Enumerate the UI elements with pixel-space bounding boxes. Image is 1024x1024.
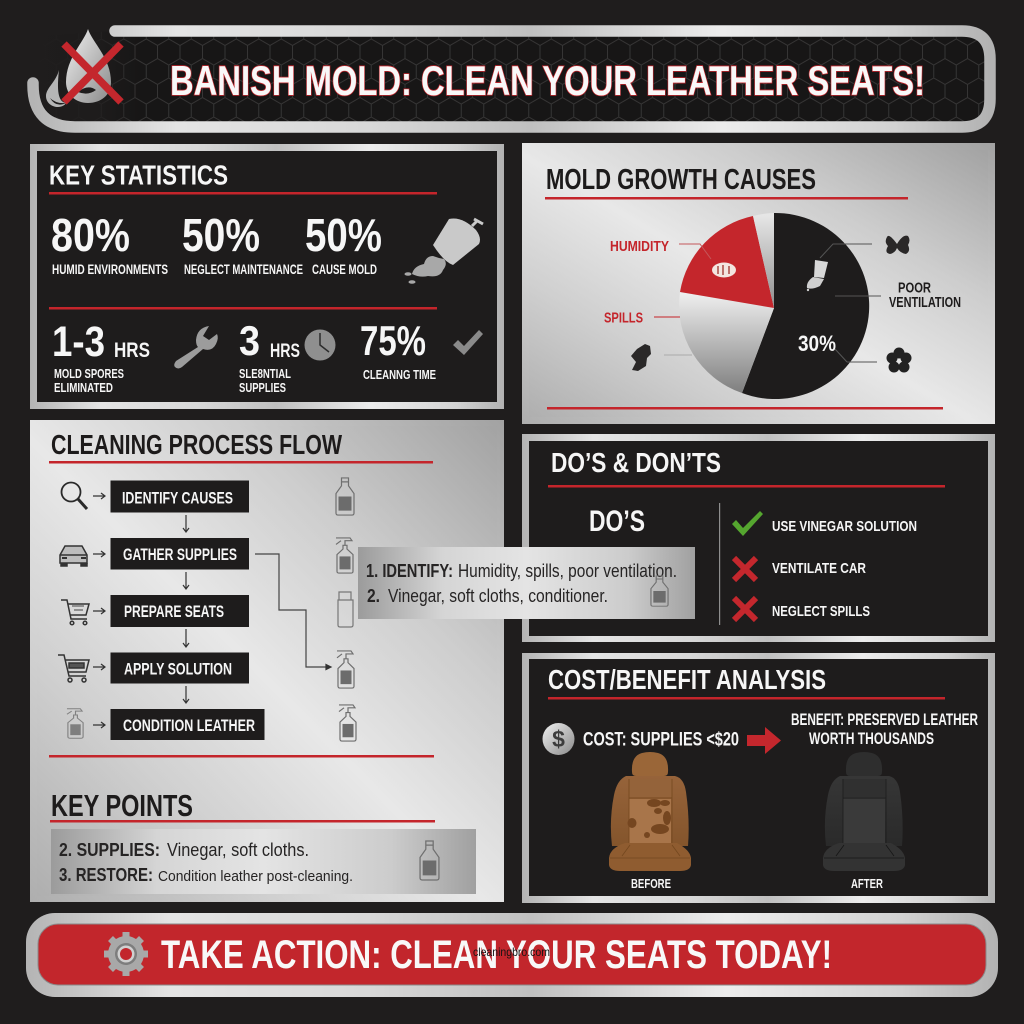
call to action text: TAKE ACTION: CLEAN YOUR SEATS TODAY! — [161, 933, 832, 977]
label: poor ventilation: VENTILATION — [889, 295, 961, 311]
item: ventilate car — [734, 558, 866, 580]
stat: 1-3 hrs mold spores eliminated: 1-3 — [52, 318, 105, 366]
panel: key statistics — [30, 144, 504, 409]
title banner — [30, 29, 990, 127]
icon: spray bottle 4 — [339, 705, 356, 741]
icon: spilled bottle — [404, 218, 483, 284]
callout: identify overlay: 2. — [367, 586, 380, 606]
label: benefit — [791, 710, 978, 748]
stat: 80% humid environments — [51, 209, 168, 277]
stat: 1-3 hrs mold spores eliminated: ELIMINATED — [54, 381, 113, 395]
stat: 3 hrs essential supplies: SUPPLIES — [239, 381, 286, 395]
heading: key points: KEY POINTS — [51, 788, 193, 823]
callout: key points: Condition leather post-cleaning. — [158, 868, 353, 885]
label: spills — [604, 310, 680, 326]
heading: cleaning process flow: CLEANING PROCESS FLOW — [51, 429, 342, 460]
arrows: flow connectors — [93, 493, 331, 728]
icon: dollar coin: $ — [552, 726, 565, 752]
heading: do's and don'ts: DO’S & DON’TS — [551, 447, 721, 478]
step: gather supplies — [110, 538, 249, 570]
label: poor ventilation: POOR — [898, 280, 931, 296]
callout: key points: 3. RESTORE: — [59, 865, 153, 885]
panel: mold growth causes — [522, 143, 995, 424]
icon: shopping cart with tray — [58, 655, 89, 682]
callout: identify overlay: 1. IDENTIFY: — [366, 561, 453, 581]
panel: cost/benefit analysis — [522, 653, 995, 903]
icon: gear — [104, 932, 148, 976]
stat: 50% neglect maintenance: NEGLECT MAINTENANCE — [184, 262, 303, 277]
item: neglect spills — [734, 598, 870, 620]
icon: check mark — [453, 330, 483, 355]
icon: spray bottle 2 — [336, 538, 353, 573]
label: after: AFTER — [851, 876, 883, 891]
pie chart — [679, 213, 869, 399]
stat: 3 hrs essential supplies: SLE8NTIAL — [239, 367, 291, 381]
stat: 75% cleaning time — [360, 317, 436, 382]
item: ventilate car: VENTILATE CAR — [772, 560, 866, 577]
illustration: clean seat after — [823, 752, 905, 871]
icon: wrench — [174, 326, 218, 368]
step: condition leather — [110, 709, 264, 740]
stat: 50% cause mold: 50% — [305, 209, 382, 261]
icon: bottle — [651, 576, 668, 606]
icon: mold drop with red cross — [46, 29, 121, 107]
step: identify causes: IDENTIFY CAUSES — [122, 488, 233, 508]
label: cost: COST: SUPPLIES <$20 — [583, 730, 739, 750]
stat: 75% cleaning time: CLEANNG TIME — [363, 368, 436, 382]
stat: 80% humid environments: 80% — [51, 209, 130, 261]
stat: 50% neglect maintenance: 50% — [182, 209, 260, 261]
stat: 3 hrs essential supplies: 3 — [239, 317, 260, 364]
item: neglect spills: NEGLECT SPILLS — [772, 603, 870, 620]
label: poor ventilation — [835, 280, 961, 311]
label: humidity: HUMIDITY — [610, 239, 669, 255]
icon: bottle 1 — [336, 478, 354, 515]
icon: car — [60, 546, 87, 566]
call to action banner — [26, 913, 998, 997]
heading: mold growth causes: MOLD GROWTH CAUSES — [546, 164, 816, 196]
label: spills: SPILLS — [604, 310, 643, 326]
icon: spray bottle 3 — [337, 651, 354, 688]
item: use vinegar solution — [732, 511, 917, 536]
step: identify causes — [110, 480, 249, 512]
illustration: stained seat before — [609, 752, 691, 871]
icon: magnifier — [62, 482, 87, 509]
step: prepare seats: PREPARE SEATS — [124, 602, 224, 621]
stat: 1-3 hrs mold spores eliminated: MOLD SPORES — [54, 367, 124, 381]
icon: dollar coin — [542, 723, 574, 755]
step: prepare seats — [110, 595, 249, 627]
stat: 3 hrs essential supplies — [239, 317, 300, 395]
icon: cloud in humidity slice — [712, 262, 736, 278]
panel: do's and don'ts — [522, 434, 995, 642]
pie value: 30%: 30% — [798, 331, 836, 356]
icon: spill splatter — [631, 344, 692, 371]
item: use vinegar solution: USE VINEGAR SOLUTION — [772, 518, 917, 535]
icon: butterfly fan — [820, 236, 910, 258]
icon: bottle in ventilation slice — [807, 260, 828, 291]
label: benefit: WORTH THOUSANDS — [809, 729, 934, 748]
stat: 50% cause mold — [305, 209, 382, 277]
icon: bottle — [420, 841, 439, 880]
watermark: cleaningbro.com — [473, 945, 550, 959]
step: apply solution: APPLY SOLUTION — [124, 660, 232, 678]
step: condition leather: CONDITION LEATHER — [123, 716, 255, 735]
heading: cost/benefit analysis: COST/BENEFIT ANALYSIS — [548, 664, 826, 695]
callout: identify overlay — [358, 547, 695, 619]
callout: identify overlay: Vinegar, soft cloths, conditioner. — [388, 586, 608, 606]
stat: 50% cause mold: CAUSE MOLD — [312, 262, 377, 277]
icon: shopping cart — [61, 600, 89, 625]
stat: 1-3 hrs mold spores eliminated: HRS — [114, 339, 150, 362]
label: humidity — [610, 239, 711, 259]
label: before: BEFORE — [631, 876, 671, 891]
heading: key statistics: KEY STATISTICS — [49, 160, 228, 190]
stat: 80% humid environments: HUMID ENVIRONMENTS — [52, 262, 168, 277]
stat: 1-3 hrs mold spores eliminated — [52, 318, 150, 395]
icon: spray bottle — [67, 709, 83, 738]
stat: 75% cleaning time: 75% — [360, 317, 426, 364]
icon: clock — [304, 330, 336, 360]
stat: 50% neglect maintenance — [182, 209, 303, 277]
callout: key points: 2. SUPPLIES: — [59, 840, 160, 860]
icon: tube — [338, 592, 353, 627]
callout: identify overlay: Humidity, spills, poor ventilation. — [458, 561, 677, 581]
step: apply solution — [110, 652, 249, 684]
subheading: do's: DO’S — [589, 505, 645, 538]
step: gather supplies: GATHER SUPPLIES — [123, 545, 237, 564]
arrow: cost to benefit — [747, 727, 781, 754]
callout: key points: Vinegar, soft cloths. — [167, 840, 309, 860]
panel: cleaning process flow — [30, 420, 504, 902]
icon: ventilation fan — [835, 348, 912, 372]
callout: key points — [51, 829, 476, 894]
stat: 3 hrs essential supplies: HRS — [270, 341, 300, 362]
